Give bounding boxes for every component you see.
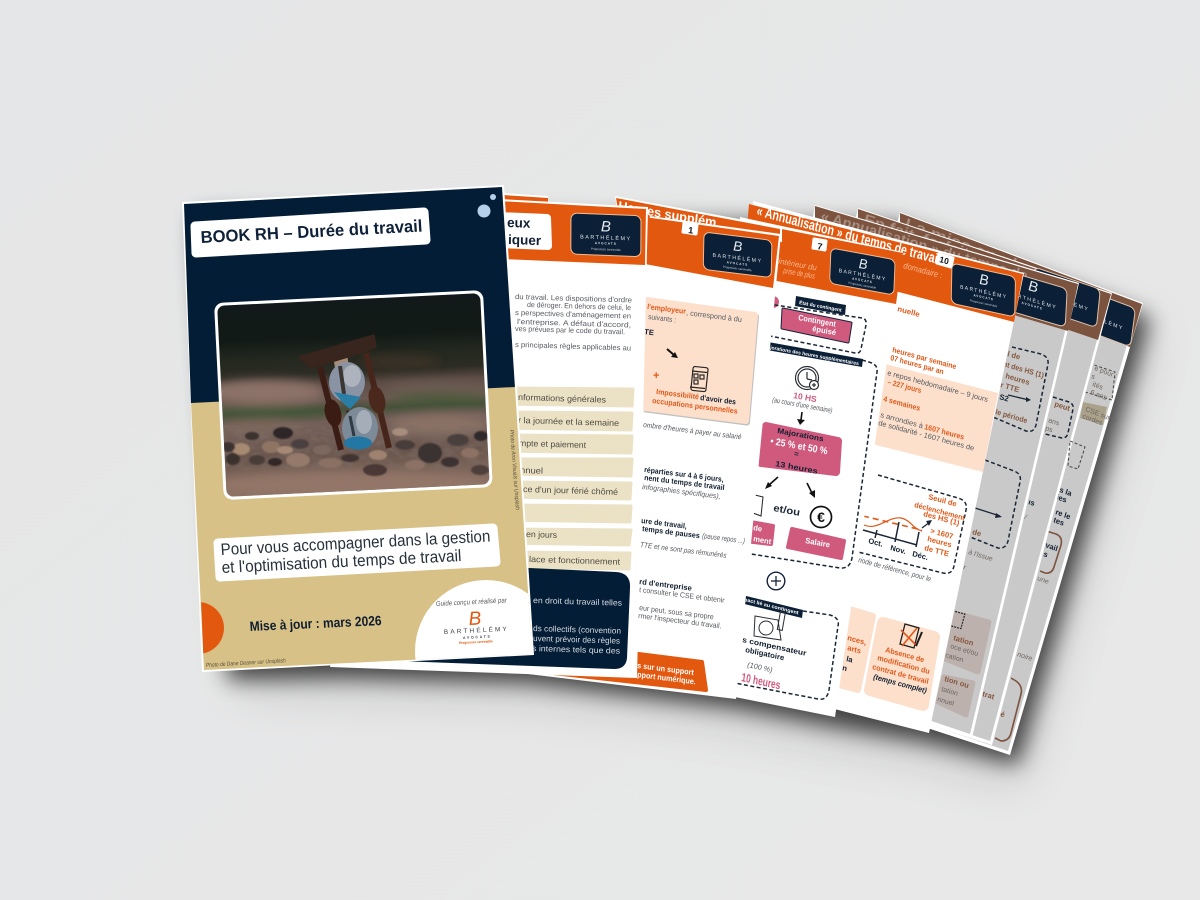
chart: seuil de déclenchement: Nov. bbox=[890, 543, 907, 556]
text B: ans bbox=[1047, 417, 1060, 428]
majorations des heures supplémentaires: • 25 % et 50 % bbox=[770, 436, 828, 457]
logo E: BARTHÉLÉMY bbox=[839, 267, 887, 283]
majorations des heures supplémentaires: de bbox=[753, 523, 763, 534]
cover logo block: B bbox=[468, 608, 482, 630]
body text F: infographies spécifiques), bbox=[642, 482, 721, 501]
blurred background bands bbox=[205, 356, 495, 499]
header text E bbox=[775, 256, 818, 281]
navy callout G bbox=[398, 562, 630, 669]
outlined box A2 bbox=[995, 678, 1021, 741]
table of contents labels: mpte et paiement bbox=[519, 438, 587, 450]
decorative blue dots bbox=[478, 194, 496, 218]
text B: ıs bbox=[1027, 497, 1036, 508]
icon: clock bbox=[796, 366, 818, 390]
body text D: 1607 heures bbox=[924, 422, 965, 442]
page number 10 bbox=[937, 254, 953, 267]
cover navy top bbox=[184, 187, 515, 404]
page: back sheet A bbox=[780, 212, 1143, 755]
header text E: prise de plus bbox=[782, 266, 816, 281]
body text D: e repos hebdomadaire – 9 jours bbox=[887, 368, 989, 404]
majorations des heures supplémentaires bbox=[745, 342, 877, 568]
card: peach left D: la bbox=[846, 654, 854, 665]
arrow bbox=[667, 349, 678, 358]
header D bbox=[745, 204, 1023, 322]
body text F: rmer l'inspecteur du travail. bbox=[638, 611, 722, 630]
white title box G: iquer bbox=[508, 232, 542, 248]
table of contents labels: lace et fonctionnement bbox=[529, 554, 621, 567]
hourglass bbox=[299, 335, 389, 450]
card C2: nnuel bbox=[937, 696, 955, 708]
logo G: AVOCATS bbox=[595, 241, 617, 246]
table of contents labels: r la journée et la semaine bbox=[518, 415, 619, 428]
drop shadow bbox=[195, 215, 1155, 785]
logo F: AVOCATS bbox=[727, 260, 748, 267]
text A: s bbox=[1042, 549, 1049, 559]
header text A: La mise en place bbox=[903, 215, 1049, 282]
pink salaire box bbox=[788, 529, 844, 558]
text A: e pour : bbox=[1093, 365, 1118, 380]
intro text G: ves prévues par le code du travail. bbox=[515, 324, 625, 336]
body text F: eur peut, sous sa propre bbox=[639, 603, 714, 621]
logo C: B bbox=[1028, 278, 1039, 297]
cover logo block: BARTHÉLÉMY bbox=[444, 624, 508, 636]
body text F: (pause repos ...) bbox=[702, 531, 746, 545]
cover logo block bbox=[436, 597, 508, 645]
orange callout F bbox=[553, 644, 706, 690]
logo F bbox=[703, 232, 772, 278]
text A: ıs la bbox=[1056, 484, 1074, 498]
text C: trat bbox=[982, 689, 996, 702]
intro text G: du travail. Les dispositions d'ordre bbox=[515, 292, 632, 305]
table of contents rows bbox=[500, 388, 633, 569]
text C: r TTE bbox=[1000, 380, 1020, 394]
card C1: oce et/ou bbox=[950, 643, 979, 658]
page: 10 annualisation bbox=[720, 201, 1024, 733]
logo D: BARTHÉLÉMY bbox=[960, 283, 1007, 301]
text A bbox=[999, 365, 1118, 719]
impact lié au contingent: s compensateur bbox=[742, 635, 807, 658]
text A: CSE sur le bbox=[1084, 406, 1118, 425]
cover logo block: AVOCATS bbox=[463, 635, 491, 640]
text A: ies bbox=[1055, 492, 1068, 505]
body text D: riode de référence, pour le bbox=[858, 555, 932, 583]
chart: seuil de déclenchement: des HS (1) bbox=[923, 509, 961, 528]
header text E: l'intérieur du bbox=[775, 256, 818, 273]
card C2 bbox=[937, 674, 973, 715]
body text F: TTE et ne sont pas rémunérés bbox=[640, 540, 727, 560]
peach box F bbox=[644, 300, 756, 422]
cover title: BOOK RH – Durée du travail bbox=[200, 216, 423, 247]
orange callout F: pport numérique. bbox=[637, 670, 696, 686]
intro text G bbox=[515, 292, 632, 352]
table of contents labels: nformations générales bbox=[518, 392, 606, 405]
gravel texture bbox=[224, 436, 489, 466]
text C: le période bbox=[995, 407, 1028, 425]
table of contents labels: ce d'un jour férié chômé bbox=[523, 484, 618, 497]
logo C: AVOCATS bbox=[1021, 301, 1043, 311]
chart: seuil de déclenchement: Seuil de bbox=[928, 492, 958, 509]
chart: seuil de déclenchement: Oct. bbox=[868, 536, 884, 549]
page number 7: 7 bbox=[817, 241, 823, 252]
text C: ent des HS (1) bbox=[999, 358, 1045, 380]
page: 1 temps de travail effectif bbox=[528, 216, 781, 699]
cover logo block: Guide conçu et réalisé par bbox=[436, 597, 508, 608]
cover logo block: Progressez sereinable bbox=[459, 639, 493, 645]
cover white circle bbox=[415, 580, 532, 660]
navy callout G: uvent prévoir des règles bbox=[533, 634, 620, 646]
header F bbox=[645, 217, 779, 288]
peach box F: d'avoir des bbox=[700, 393, 736, 406]
card: peach left D: n bbox=[842, 663, 848, 673]
état du contingent: Contingent bbox=[798, 313, 837, 329]
body text D bbox=[858, 304, 989, 583]
tan strip A bbox=[1080, 402, 1107, 425]
page: cover bbox=[182, 185, 534, 672]
text C: S2 bbox=[999, 392, 1010, 404]
photo credits bbox=[206, 430, 520, 669]
dashed box C2 bbox=[955, 460, 1020, 548]
peach block D bbox=[860, 360, 998, 472]
logo E: Progressez sereinable bbox=[848, 281, 877, 290]
cover tan bottom bbox=[191, 387, 532, 670]
body text F: ure de travail, bbox=[641, 516, 687, 531]
page: heures supplémentaires behind sheet: Heures supplém bbox=[618, 198, 717, 230]
chart: seuil de déclenchement: heures bbox=[927, 534, 952, 549]
stones bbox=[221, 427, 489, 476]
text C: heures bbox=[1005, 371, 1031, 387]
pink majorations box bbox=[761, 426, 838, 472]
peach box F: suivants : bbox=[648, 312, 676, 324]
peach box F: occupations personnelles bbox=[652, 396, 738, 416]
card: peach left D bbox=[820, 606, 873, 690]
card: peach left D: arts bbox=[847, 643, 862, 656]
card: peach left D: nces, bbox=[847, 633, 867, 647]
pink repos box bbox=[745, 521, 773, 544]
majorations des heures supplémentaires: 10 HS bbox=[793, 390, 818, 404]
logo B: BARTHÉLÉMY bbox=[1040, 290, 1089, 313]
body text F: nent du temps de travail bbox=[644, 473, 725, 492]
logo D: Progressez sereinable bbox=[970, 298, 998, 308]
majorations des heures supplémentaires: jorations des heures supplémentaires bbox=[769, 345, 859, 367]
cover subtitle: Pour vous accompagner dans la gestion bbox=[220, 528, 491, 559]
page number 7 bbox=[813, 239, 826, 252]
table of contents labels bbox=[518, 392, 621, 567]
pink dot bbox=[767, 296, 779, 308]
page: enjeux introduction bbox=[330, 193, 648, 678]
text C: l de bbox=[1007, 349, 1021, 362]
peach box F: , correspond à du bbox=[686, 308, 742, 324]
impact lié au contingent: (100 %) bbox=[747, 660, 774, 675]
logo G: B bbox=[601, 218, 611, 236]
table of contents labels: en jours bbox=[526, 529, 557, 540]
text A: 6 ans bbox=[1089, 389, 1108, 402]
outlined box A bbox=[1040, 530, 1061, 573]
text C: de bbox=[972, 527, 982, 538]
page number 10: 10 bbox=[939, 254, 950, 266]
text B: / bbox=[1023, 514, 1028, 522]
card C1: cation bbox=[945, 652, 964, 664]
header title D: domadaire : bbox=[903, 260, 944, 280]
white title box G bbox=[497, 215, 548, 248]
header E bbox=[730, 220, 903, 304]
icon: plus bbox=[767, 572, 785, 590]
logo D: B bbox=[979, 271, 989, 290]
état du contingent: État du contingent bbox=[799, 298, 843, 314]
arrows to outcomes bbox=[765, 477, 815, 498]
timeline arrow C bbox=[975, 395, 1031, 518]
icon: euro: € bbox=[817, 509, 825, 525]
body text F: temps de pauses bbox=[642, 524, 700, 540]
état du contingent: épuisé bbox=[812, 324, 837, 337]
intro text G: s principales règles applicables au bbox=[515, 340, 631, 352]
text C: à l'issue bbox=[968, 549, 993, 563]
body text F: rd d'entreprise bbox=[639, 577, 692, 593]
page number 1: 1 bbox=[688, 225, 694, 236]
text C: r bbox=[963, 564, 967, 572]
body text D: de solidarité - 1607 heures de bbox=[878, 418, 975, 453]
logo C bbox=[998, 269, 1067, 327]
intro text G: l'entreprise. A défaut d'accord, bbox=[517, 317, 631, 329]
text A: ités bbox=[1091, 381, 1104, 392]
dashed box C1 bbox=[993, 347, 1048, 431]
majorations des heures supplémentaires: et/ou bbox=[773, 503, 801, 519]
body text D: 07 heures par an bbox=[890, 353, 945, 376]
logo E bbox=[830, 248, 895, 295]
body text D: heures par semaine bbox=[892, 345, 957, 371]
card: absence de modification: Absence de bbox=[885, 645, 925, 664]
logo E: AVOCATS bbox=[852, 276, 873, 284]
peach box F: TE bbox=[644, 327, 654, 337]
icon: crossed document bbox=[900, 624, 922, 648]
logo G: BARTHÉLÉMY bbox=[580, 233, 632, 242]
chart: seuil de déclenchement: Déc. bbox=[912, 549, 929, 562]
impact lié au contingent: 10 heures bbox=[741, 670, 782, 692]
plus sign: + bbox=[653, 370, 659, 382]
photo credits: Photo de Dane Deaner sur Unsplash bbox=[206, 658, 286, 669]
text A: é bbox=[999, 709, 1006, 719]
card: absence de modification: modification du bbox=[877, 653, 931, 676]
text A: une bbox=[1036, 575, 1049, 586]
body text F bbox=[638, 420, 746, 630]
chart: seuil de déclenchement bbox=[858, 475, 966, 573]
intro text G: de déroger. En dehors de celui, le bbox=[527, 300, 631, 312]
header title D: « Annualisation » du temps de travail bbox=[755, 203, 942, 268]
text B: noire bbox=[1016, 651, 1033, 663]
orange callout F: s sur un support bbox=[637, 661, 694, 677]
page: back sheet B bbox=[760, 208, 1112, 745]
logo F: Progressez sereinable bbox=[723, 265, 752, 272]
card: absence de modification: (temps complet) bbox=[873, 672, 928, 695]
peach box F: l'employeur bbox=[647, 302, 686, 316]
état du contingent bbox=[765, 296, 866, 353]
body text D: 4 semaines bbox=[883, 394, 921, 413]
page: heures supplémentaires behind sheet bbox=[615, 196, 782, 242]
body text D: nuelle bbox=[897, 304, 921, 319]
text A: vail bbox=[1044, 540, 1059, 553]
majorations des heures supplémentaires: (au cours d'une semaine) bbox=[772, 395, 833, 415]
page number 1 bbox=[683, 223, 697, 236]
chart: seuil de déclenchement: de TTE bbox=[924, 543, 950, 559]
header text C: « Annualisation » du temps de bbox=[819, 208, 1029, 285]
arrow down bbox=[797, 412, 805, 425]
peach box F: Impossibilité bbox=[656, 387, 699, 401]
text B: ps bbox=[1044, 425, 1054, 434]
body text F: réparties sur 4 à 6 jours, bbox=[644, 465, 724, 484]
header G bbox=[480, 200, 646, 265]
header text B: En fait, forfait annuel bbox=[862, 210, 1028, 280]
text A: re le bbox=[1054, 507, 1072, 521]
body text D: – 227 jours bbox=[887, 377, 922, 395]
logo G bbox=[571, 213, 641, 257]
impact lié au contingent: obligatoire bbox=[745, 645, 785, 662]
majorations des heures supplémentaires: Majorations bbox=[777, 426, 824, 443]
logo F: BARTHÉLÉMY bbox=[713, 252, 762, 265]
majorations des heures supplémentaires: = bbox=[794, 449, 800, 459]
cover subtitle bbox=[218, 528, 496, 577]
logo D: AVOCATS bbox=[973, 293, 994, 302]
majorations des heures supplémentaires: 13 heures bbox=[775, 459, 818, 476]
cover subtitle: et l'optimisation du temps de travail bbox=[221, 547, 462, 577]
card C1: tation bbox=[953, 633, 975, 648]
navy callout G: en droit du travail telles bbox=[533, 596, 622, 608]
text A: tes bbox=[1052, 515, 1065, 528]
icon: sleep bbox=[753, 495, 763, 516]
cover date: Mise à jour : mars 2026 bbox=[249, 613, 382, 634]
logo F: B bbox=[733, 238, 742, 254]
text B: peut bbox=[1053, 399, 1071, 413]
majorations des heures supplémentaires: ment bbox=[753, 534, 772, 546]
intro text G: s perspectives d'aménagement en bbox=[515, 308, 631, 320]
dashed note A bbox=[1085, 362, 1115, 400]
card: absence de modification bbox=[870, 623, 934, 705]
logo E: B bbox=[858, 256, 868, 272]
chart: seuil de déclenchement: déclenchement bbox=[914, 500, 966, 523]
cover orange circle bbox=[201, 602, 224, 654]
icon: face pillow bbox=[754, 612, 785, 640]
logo A bbox=[1065, 284, 1136, 347]
text A: s bbox=[1090, 373, 1096, 381]
card C2: tion ou bbox=[944, 674, 970, 690]
page: 7 heures supplémentaires contingent bbox=[700, 217, 903, 717]
logo B bbox=[1030, 267, 1100, 328]
body text F: ombre d'heures à payer au salarié bbox=[643, 420, 742, 441]
chart: seuil de déclenchement: > 1607 bbox=[930, 526, 954, 541]
icon: phone bbox=[690, 366, 708, 392]
body text F: t consulter le CSE et obtenir bbox=[639, 585, 725, 605]
logo D bbox=[951, 263, 1015, 317]
logo G: Progressez sereinable bbox=[591, 247, 621, 252]
logo C: BARTHÉLÉMY bbox=[1008, 290, 1057, 311]
table of contents labels: nnuel bbox=[520, 465, 543, 476]
card C1 bbox=[943, 611, 989, 672]
logo A: BARTHÉLÉMY bbox=[1075, 307, 1124, 332]
cover photo: hourglass bbox=[205, 290, 496, 500]
text C bbox=[963, 349, 1045, 702]
header title D: Aménagement bbox=[755, 221, 807, 244]
majorations des heures supplémentaires: Salaire bbox=[805, 536, 831, 550]
dashed box B bbox=[1045, 397, 1073, 438]
card: absence de modification: contrat de travail bbox=[872, 662, 929, 686]
text A: cordes bbox=[1081, 413, 1104, 427]
card C2: tation bbox=[941, 686, 959, 698]
icon: euro bbox=[810, 506, 832, 528]
navy callout G: ds collectifs (convention bbox=[533, 624, 622, 636]
text B bbox=[1016, 399, 1071, 663]
impact lié au contingent: pact lié au contingent bbox=[744, 597, 799, 617]
white title box G: eux bbox=[507, 215, 531, 231]
page: back sheet C bbox=[740, 205, 1079, 738]
body text D: s arrondies à bbox=[880, 410, 925, 431]
photo credits: Photo de Aron Visuals sur Unsplash bbox=[508, 430, 520, 510]
impact lié au contingent bbox=[735, 594, 838, 699]
small dashed box B bbox=[1068, 441, 1085, 469]
navy callout G: s internes tels que des bbox=[532, 644, 620, 656]
